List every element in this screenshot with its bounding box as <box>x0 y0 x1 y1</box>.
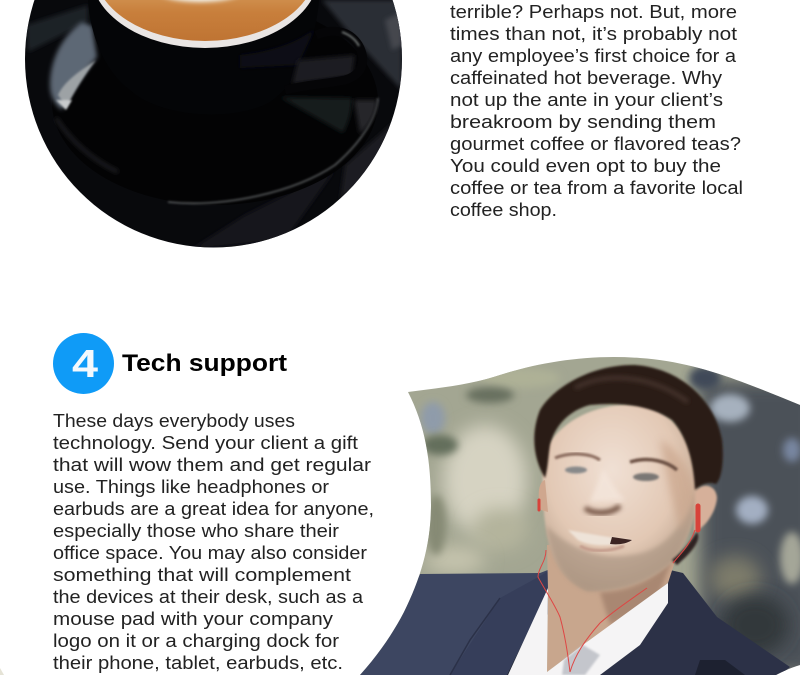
right ear <box>694 486 717 532</box>
stubble and shading <box>547 504 694 591</box>
body text: coffee paragraph <box>450 1 743 220</box>
photo: coffee cup in circle <box>20 0 410 255</box>
body text: coffee paragraph: You could even opt to buy the <box>450 155 721 176</box>
earbuds and red wire <box>538 500 698 672</box>
body text: tech support paragraph: These days everybody uses <box>53 410 295 431</box>
jacket <box>350 568 790 675</box>
icon: number 4 badge <box>53 333 114 394</box>
blurred background <box>350 350 800 675</box>
left ear <box>539 480 548 512</box>
bottom-left page corner <box>0 668 4 675</box>
body text: tech support paragraph: mouse pad with your company <box>53 608 334 629</box>
neck <box>547 545 674 672</box>
cup body <box>88 4 367 84</box>
body text: coffee paragraph: terrible? Perhaps not. But, more <box>450 1 737 22</box>
face <box>542 404 698 568</box>
coffee and rim <box>91 0 319 48</box>
body text: coffee paragraph: gourmet coffee or flavored teas? <box>450 133 741 154</box>
icon: number 4 badge: 4 <box>72 343 98 386</box>
body text: coffee paragraph: caffeinated hot beverage. Why <box>450 67 723 88</box>
body text: tech support paragraph: logo on it or a charging dock for <box>53 630 339 651</box>
body text: coffee paragraph: times than not, it’s probably not <box>450 23 737 44</box>
photo: man with red earbuds in wavy frame <box>350 350 800 675</box>
hair <box>534 365 723 490</box>
body text: tech support paragraph: office space. You may also consider <box>53 542 367 563</box>
body text: tech support paragraph: especially those who share their <box>53 520 339 541</box>
body text: tech support paragraph: something that will complement <box>53 564 351 585</box>
body text: tech support paragraph: technology. Send your client a gift <box>53 432 358 453</box>
heading: Tech support: Tech support <box>122 350 287 377</box>
body text: coffee paragraph: coffee shop. <box>450 199 557 220</box>
body text: tech support paragraph: the devices at their desk, such as a <box>53 586 364 607</box>
body text: tech support paragraph: use. Things like headphones or <box>53 476 329 497</box>
body text: tech support paragraph: their phone, tablet, earbuds, etc. <box>53 652 343 673</box>
body text: coffee paragraph: breakroom by sending them <box>450 111 716 132</box>
body text: tech support paragraph: earbuds are a great idea for anyone, <box>53 498 374 519</box>
eyebrows, eyes, nose, mouth <box>555 454 677 551</box>
body text: coffee paragraph: any employee’s first choice for a <box>450 45 737 66</box>
body text: tech support paragraph <box>53 410 374 673</box>
saucer <box>50 0 378 205</box>
body text: coffee paragraph: not up the ante in your client’s <box>450 89 723 110</box>
body text: tech support paragraph: that will wow them and get regular <box>53 454 371 475</box>
body text: coffee paragraph: coffee or tea from a favorite local <box>450 177 743 198</box>
shirt collar <box>508 583 668 675</box>
